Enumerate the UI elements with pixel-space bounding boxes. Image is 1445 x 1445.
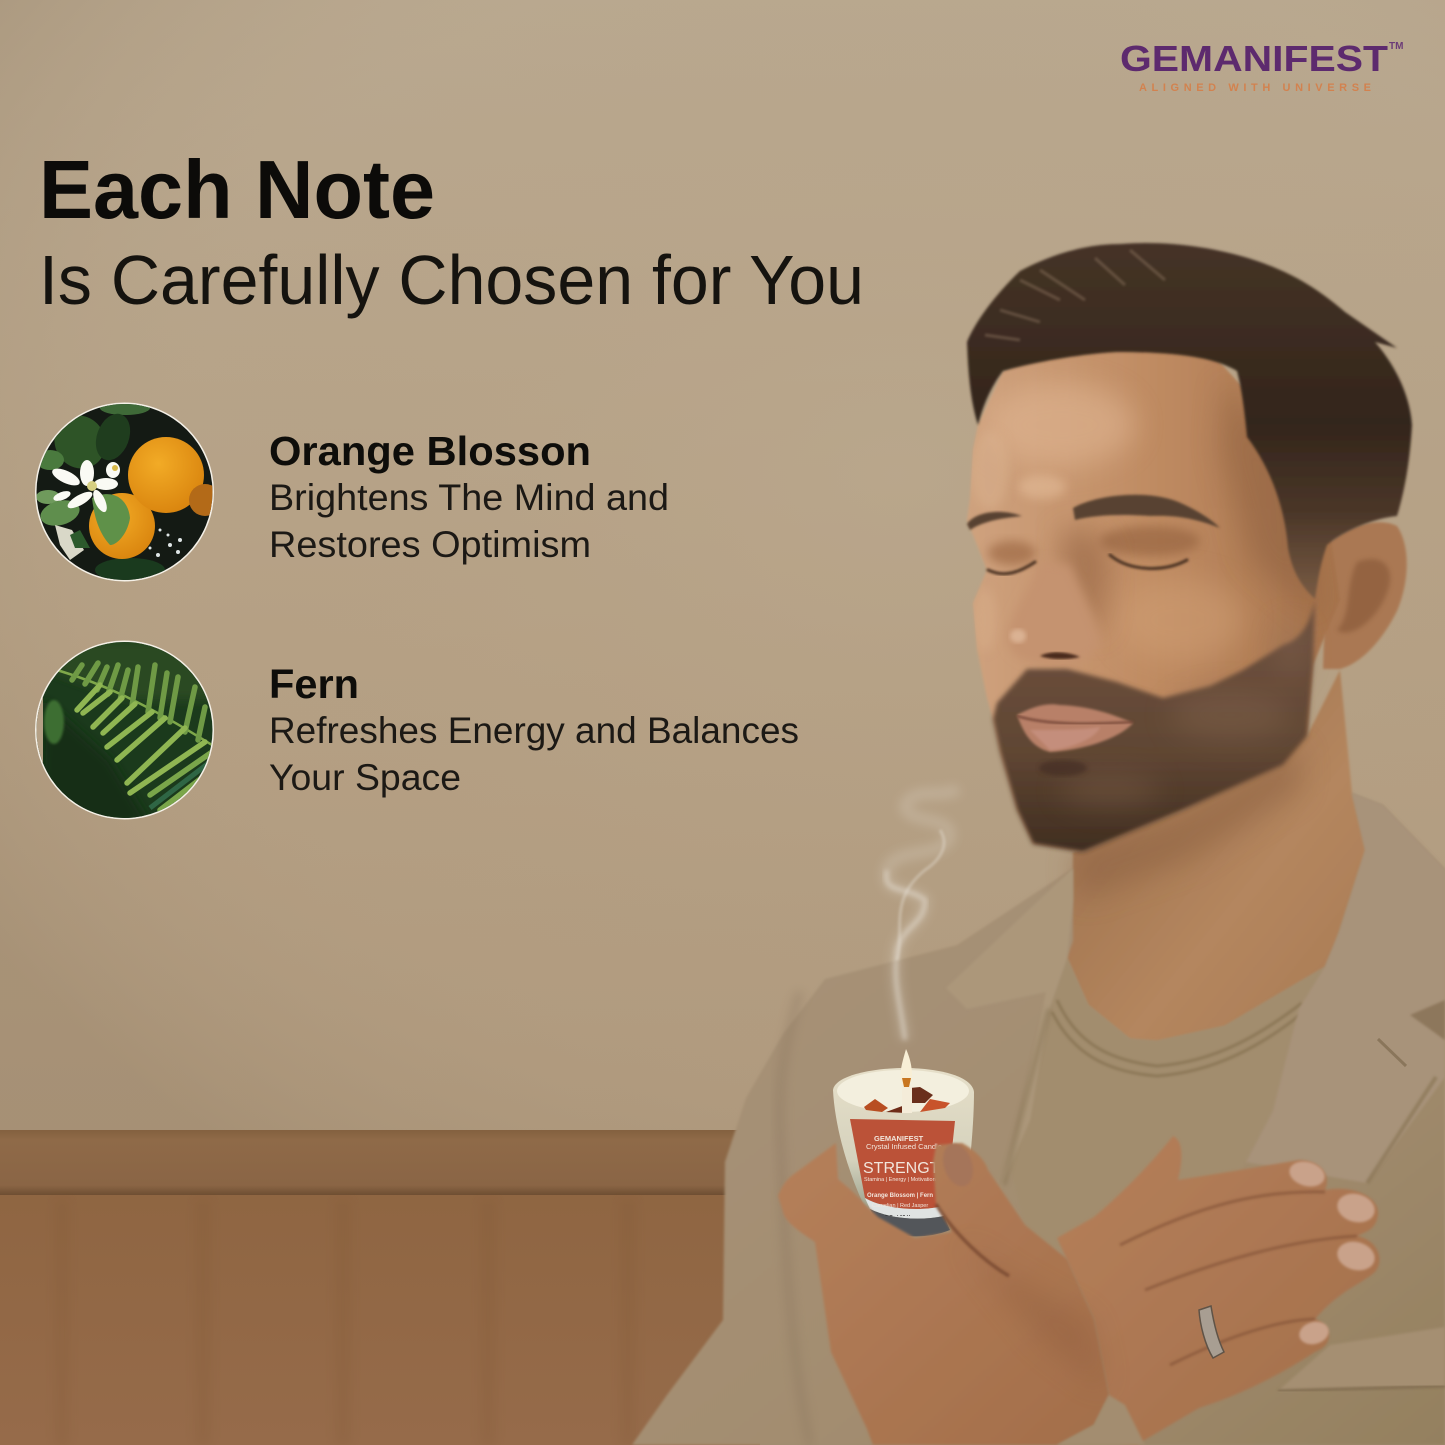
hair xyxy=(967,243,1412,599)
title xyxy=(39,143,864,319)
sleeve seam shading xyxy=(780,992,810,1445)
title: Is Carefully Chosen for You xyxy=(39,241,864,319)
lower leaflets xyxy=(77,685,205,793)
label text: Orange Blossom | Fern xyxy=(867,1193,933,1199)
lips xyxy=(1017,704,1133,752)
description: Brightens The Mind and xyxy=(269,477,669,518)
logo xyxy=(1120,38,1403,94)
closed eyes xyxy=(988,555,1187,574)
heading: Fern xyxy=(269,661,359,707)
heading: Orange Blosson xyxy=(269,428,591,474)
face xyxy=(967,340,1340,852)
label text: Crystal Infused Candle xyxy=(866,1142,942,1151)
upper leaflets xyxy=(72,663,205,740)
wedding ring xyxy=(1199,1306,1224,1358)
label text: Stamina | Energy | Motivation xyxy=(864,1177,936,1183)
soul patch xyxy=(1039,760,1087,776)
jacket body xyxy=(632,793,1445,1445)
label text: Carnelian | Red Jasper xyxy=(872,1203,928,1209)
face shading xyxy=(970,380,1320,662)
nose xyxy=(1007,560,1100,665)
hand shading xyxy=(960,1240,1105,1390)
man illustration xyxy=(632,243,1445,1445)
wax surface xyxy=(837,1070,969,1112)
description: Your Space xyxy=(269,757,461,798)
beard stubble highlights xyxy=(1060,620,1304,806)
description: Refreshes Energy and Balances xyxy=(269,710,799,751)
crystals xyxy=(864,1099,888,1112)
jacket right lapel xyxy=(1246,793,1445,1183)
note: fern xyxy=(30,635,799,825)
icon: fern photo xyxy=(35,640,214,820)
jacket left lapel xyxy=(946,868,1073,1190)
title: Each Note xyxy=(39,143,435,236)
candle xyxy=(833,1049,974,1236)
label text: STRENGTH xyxy=(863,1160,951,1177)
logo: ALIGNED WITH UNIVERSE xyxy=(1139,82,1371,94)
label text: 2 Oz | 12 Hrs xyxy=(885,1215,915,1221)
label text xyxy=(864,1136,942,1216)
neck shadow under jaw xyxy=(1073,745,1300,900)
finger creases xyxy=(1120,1192,1357,1365)
t-shirt collar shading xyxy=(1052,1000,1302,1076)
logo: TM xyxy=(1389,41,1403,52)
cuff xyxy=(1057,1395,1145,1445)
beard xyxy=(993,599,1315,852)
description: Restores Optimism xyxy=(269,524,591,565)
label text: GEMANIFEST xyxy=(874,1134,924,1143)
steam xyxy=(886,788,958,1040)
ear xyxy=(1323,522,1407,669)
note: orange blossom xyxy=(30,400,669,585)
hair highlights xyxy=(985,250,1165,340)
flame xyxy=(900,1049,912,1086)
second frond xyxy=(150,752,212,815)
thumbnail xyxy=(938,1140,978,1190)
t-shirt xyxy=(1009,958,1325,1250)
wood wainscot panel xyxy=(0,1130,760,1445)
holding hand xyxy=(778,1143,1109,1445)
icon: orange blossom photo xyxy=(30,400,221,585)
right hand on chest xyxy=(1057,1136,1379,1445)
fingernails xyxy=(1287,1158,1378,1348)
logo: GEMANIFEST xyxy=(1120,38,1388,79)
eyebrows xyxy=(967,512,1022,530)
label xyxy=(850,1119,955,1209)
neck xyxy=(1067,670,1366,1041)
candle glass xyxy=(833,1068,974,1235)
pocket xyxy=(1278,1327,1445,1391)
